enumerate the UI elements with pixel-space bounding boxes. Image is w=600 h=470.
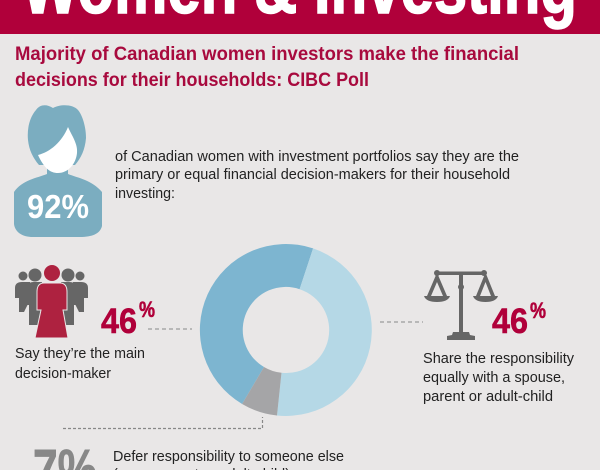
stat: 46% main decision-maker: % bbox=[139, 297, 155, 322]
dotted connector bottom bbox=[63, 417, 262, 428]
stat: 46% shared: 46 bbox=[492, 302, 528, 341]
text: shared responsibility: equally with a spouse, bbox=[423, 369, 565, 386]
text: 92% description: primary or equal financial decision-makers for their household bbox=[115, 166, 510, 183]
stat: 46% main decision-maker: 46 bbox=[101, 302, 137, 341]
dashed connector left bbox=[148, 328, 192, 330]
text: main decision-maker: decision-maker bbox=[15, 365, 111, 382]
donut chart bbox=[200, 244, 372, 416]
text: 92% description: of Canadian women with investment portfolios say they are the bbox=[115, 148, 519, 165]
text: shared responsibility bbox=[423, 350, 574, 405]
stat: 46% shared: % bbox=[530, 298, 546, 323]
heading bbox=[15, 44, 519, 91]
icon: balance scales bbox=[424, 270, 498, 340]
dashed connector right bbox=[380, 321, 423, 323]
text: main decision-maker bbox=[15, 345, 145, 382]
stat: 46% main decision-maker bbox=[101, 297, 155, 341]
stat: 46% shared bbox=[492, 298, 546, 341]
text: shared responsibility: Share the responsibility bbox=[423, 350, 574, 367]
text: main decision-maker: Say they’re the main bbox=[15, 345, 145, 362]
text: defer responsibility: Defer responsibility to someone else bbox=[113, 448, 344, 465]
heading: Majority of Canadian women investors make the financial bbox=[15, 44, 519, 65]
text: 92% description: investing: bbox=[115, 185, 175, 202]
text: shared responsibility: parent or adult-child bbox=[423, 388, 553, 405]
92% label: 92% bbox=[27, 188, 89, 225]
heading: decisions for their households: CIBC Poll bbox=[15, 70, 369, 91]
icon: group of people bbox=[15, 265, 88, 338]
icon: woman with 92% bbox=[14, 105, 102, 237]
text: 92% description bbox=[115, 148, 519, 202]
